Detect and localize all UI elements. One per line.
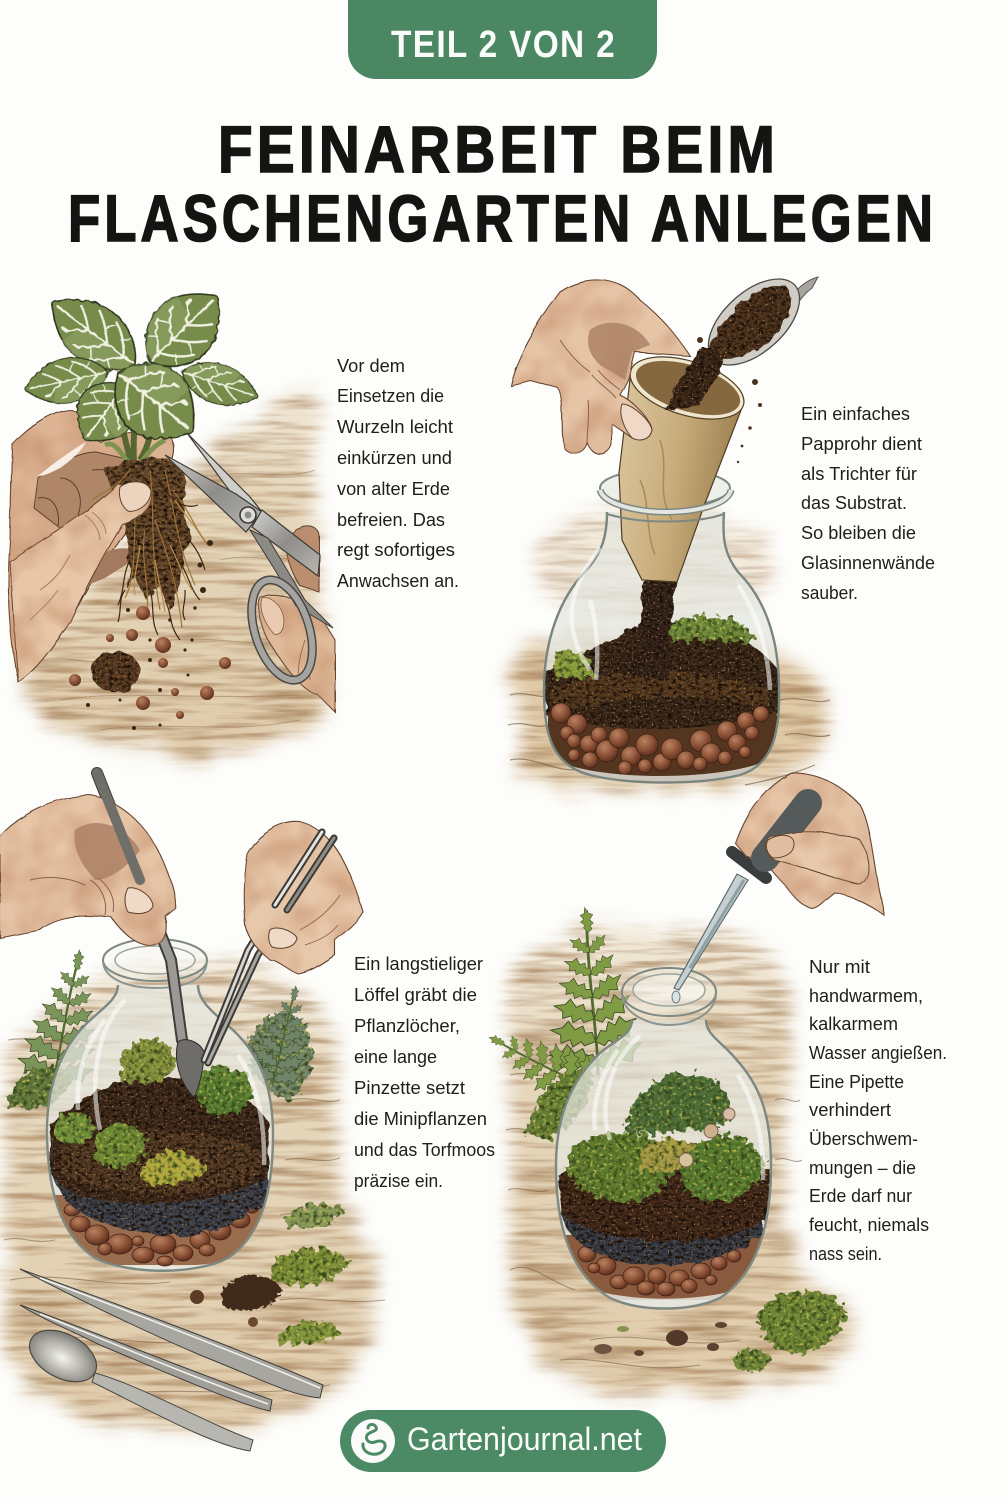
text block: step 3: eine lange	[354, 1047, 437, 1067]
gravel layer	[560, 1212, 765, 1265]
soil crumbs	[69, 540, 231, 730]
text block: step 3: Ein langstieliger	[354, 954, 483, 974]
hand holding funnel	[510, 280, 690, 454]
jar rim back	[600, 469, 730, 507]
paper funnel	[619, 345, 751, 582]
spoon over fingers	[97, 773, 140, 880]
text block: step 1	[337, 356, 459, 591]
icon: sprout logo	[351, 1419, 395, 1463]
jar rim front	[600, 490, 731, 522]
thumb over bulb	[765, 832, 869, 885]
ground wash: step 4	[506, 925, 856, 1391]
moss and plants inside jar	[566, 1132, 673, 1202]
text block: step 1: von alter Erde	[337, 479, 450, 499]
text block: step 3: Pflanzlöcher,	[354, 1016, 460, 1036]
text block: step 4: Erde darf nur	[809, 1186, 912, 1206]
text block: step 2: Papprohr dient	[801, 434, 922, 454]
text block: step 4: handwarmem,	[809, 986, 923, 1006]
long spoon	[97, 773, 204, 1097]
text block: step 3: die Minipflanzen	[354, 1109, 487, 1129]
text block: step 2: So bleiben die	[801, 523, 916, 543]
text block: step 2: als Trichter für	[801, 464, 917, 484]
panel: watering with pipette	[473, 773, 947, 1391]
text block: step 4: Eine Pipette	[809, 1072, 904, 1092]
footer badge: Gartenjournal.net	[340, 1410, 666, 1472]
jar rim	[103, 939, 207, 981]
seedling in jar	[194, 1079, 250, 1114]
text block: step 2: das Substrat.	[801, 493, 907, 513]
pipette bulb	[765, 803, 808, 858]
text block: step 3: Pinzette setzt	[354, 1078, 465, 1098]
thumb over root ball	[10, 482, 151, 682]
panel: paper funnel	[508, 263, 935, 790]
text block: step 4: kalkarmem	[809, 1014, 898, 1034]
jar rim	[622, 968, 716, 1016]
footer badge: Gartenjournal.net: Gartenjournal.net	[407, 1421, 642, 1457]
text block: step 4	[809, 957, 947, 1264]
clay pebbles	[548, 712, 776, 782]
text block: step 1: regt sofortiges	[337, 540, 455, 560]
moss clusters	[120, 1039, 176, 1083]
pebble layer	[50, 1195, 274, 1265]
text block: step 3: Löffel gräbt die	[354, 985, 477, 1005]
hand holding pipette	[735, 773, 884, 915]
fern behind jar	[473, 904, 647, 1142]
text block: step 4: Nur mit	[809, 957, 870, 977]
text block: step 4: nass sein.	[809, 1244, 882, 1264]
text block: step 1: einkürzen und	[337, 448, 452, 468]
glass jar with layers	[544, 512, 782, 790]
long tweezers	[204, 832, 334, 1063]
moss patches and crumbs	[594, 1290, 847, 1371]
ground wash: step 1	[22, 376, 328, 753]
clay pebbles	[578, 1246, 741, 1296]
right hand behind scissors	[258, 526, 335, 712]
text block: step 4: Wasser angießen.	[809, 1043, 947, 1063]
text block: step 3: und das Torfmoos	[354, 1140, 495, 1160]
text block: step 3	[354, 954, 495, 1191]
panel: roots trimming	[8, 273, 459, 753]
ferns behind jar	[8, 941, 326, 1108]
moss patches and dirt	[190, 1204, 350, 1345]
text block: step 2	[801, 404, 935, 603]
panel: planting with tools	[0, 773, 495, 1451]
part badge: Teil 2 von 2	[348, 0, 657, 79]
spoon with substrate	[665, 263, 818, 463]
title: FEINARBEIT BEIM	[218, 112, 779, 186]
text block: step 2: Glasinnenwände	[801, 553, 935, 573]
root ball	[92, 458, 208, 640]
falling substrate	[628, 580, 676, 678]
text block: step 2: sauber.	[801, 583, 858, 603]
ground wash: step 3	[4, 955, 385, 1428]
pipette	[672, 852, 766, 1003]
text block: step 4: verhindert	[809, 1100, 891, 1120]
plant with variegated leaves	[20, 273, 264, 462]
text block: step 1: befreien. Das	[337, 510, 445, 530]
scissors	[165, 433, 333, 688]
left hand holding root ball	[8, 410, 173, 682]
soil layer	[50, 1077, 270, 1203]
text block: step 4: mungen – die	[809, 1158, 916, 1178]
text block: step 4: feucht, niemals	[809, 1215, 929, 1235]
part badge: Teil 2 von 2: TEIL 2 VON 2	[391, 24, 616, 66]
gravel layer	[50, 1168, 268, 1235]
text block: step 1: Einsetzen die	[337, 386, 444, 406]
tweezers over hand	[275, 832, 334, 910]
text block: step 3: präzise ein.	[354, 1171, 443, 1191]
soil layer	[545, 622, 778, 730]
left hand	[0, 795, 175, 946]
text block: step 1: Anwachsen an.	[337, 571, 459, 591]
ground wash: step 2	[508, 507, 830, 789]
glass jar with layers	[556, 968, 771, 1312]
text block: step 1: Wurzeln leicht	[337, 417, 453, 437]
soil layer	[558, 1168, 770, 1242]
text block: step 2: Ein einfaches	[801, 404, 910, 424]
right hand	[244, 822, 363, 974]
text block: step 1: Vor dem	[337, 356, 405, 376]
title	[68, 112, 937, 255]
tools on table	[20, 1269, 323, 1451]
glass jar with layers	[47, 939, 274, 1280]
text block: step 4: Überschwem-	[809, 1129, 918, 1149]
moss inside jar	[670, 616, 755, 642]
